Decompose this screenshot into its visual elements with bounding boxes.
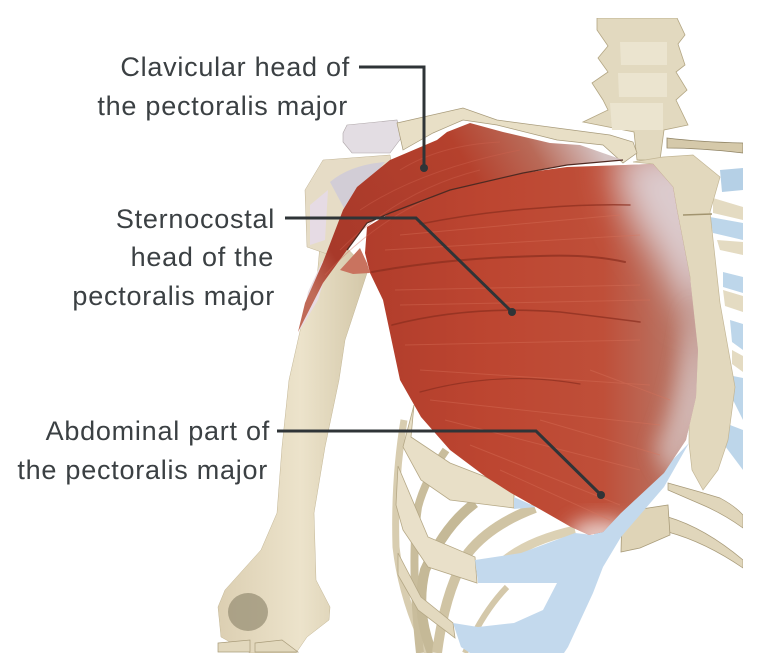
label: abdominal part	[17, 416, 270, 485]
acromion capsule	[343, 120, 402, 153]
leader: clavicular head	[359, 67, 428, 172]
leader: abdominal part	[277, 431, 605, 499]
label: sternocostal head: pectoralis major	[72, 281, 275, 311]
blue rib cartilage	[453, 443, 689, 653]
leader: sternocostal head	[285, 218, 516, 316]
panel: sternocostal head muscle	[365, 164, 698, 535]
tendon under humerus	[340, 248, 370, 274]
right side ribs and cartilage	[668, 168, 743, 568]
muscle fibre streaks	[385, 215, 670, 520]
left ribs front	[396, 405, 514, 638]
label: sternocostal head	[72, 204, 275, 311]
label: clavicular head: Clavicular head of	[120, 52, 350, 82]
humerus condyle shadow	[228, 593, 268, 631]
label: sternocostal head: Sternocostal	[116, 204, 275, 234]
right rib stump under spine	[667, 138, 743, 153]
label: sternocostal head: head of the	[131, 242, 274, 272]
pale upper-right fade	[615, 150, 715, 320]
label: abdominal part: the pectoralis major	[17, 455, 268, 485]
humerus	[218, 222, 368, 653]
shoulder head of humerus	[305, 155, 395, 255]
label: clavicular head	[97, 52, 350, 121]
sternum	[633, 155, 735, 490]
pale right edge fade	[646, 318, 698, 477]
elbow bones	[218, 640, 298, 652]
left ribs behind	[396, 420, 575, 653]
pale lower tip	[568, 519, 632, 551]
label: clavicular head: the pectoralis major	[97, 91, 348, 121]
spine	[583, 18, 688, 160]
clavicle	[397, 108, 637, 163]
panel: clavicular head muscle	[298, 123, 623, 332]
muscle fold lines	[372, 205, 640, 392]
anatomy illustration	[218, 18, 743, 653]
label: abdominal part: Abdominal part of	[46, 416, 270, 446]
